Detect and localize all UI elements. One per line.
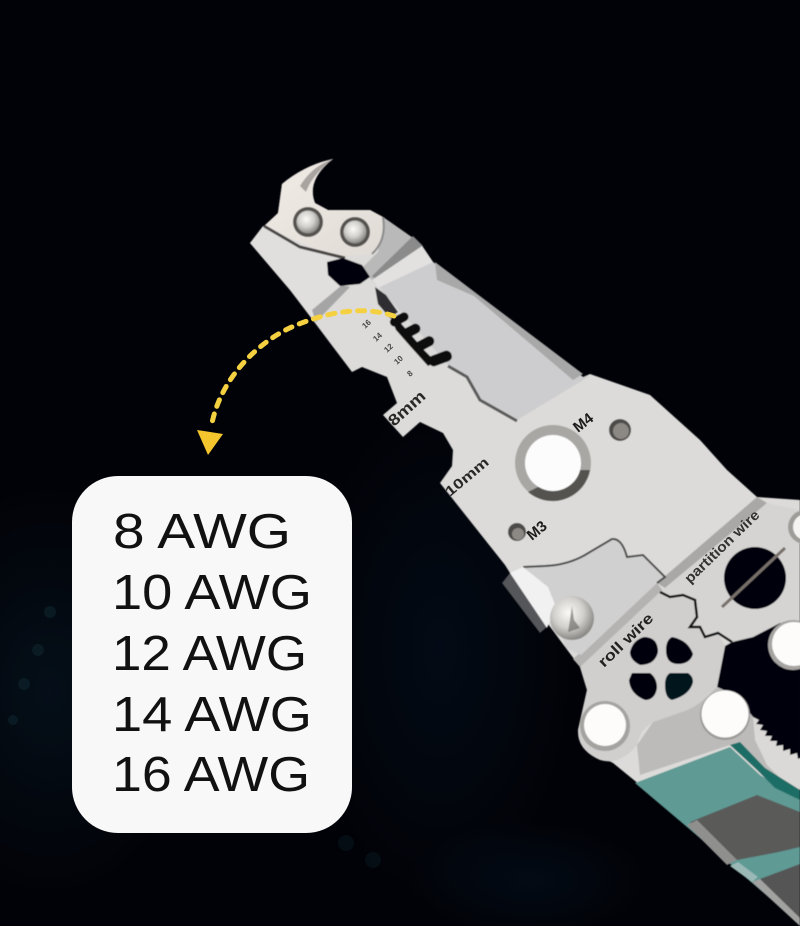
callout: AWG sizes: 8 AWG	[113, 505, 291, 559]
arrowhead	[197, 430, 223, 455]
tool engravings: 14	[371, 330, 384, 343]
callout: AWG sizes: 12 AWG	[112, 627, 307, 681]
main blade	[377, 262, 590, 420]
clover holes	[629, 637, 693, 700]
gear teeth	[753, 717, 800, 790]
rivet bottom left	[580, 701, 630, 751]
roll wire plate	[578, 592, 725, 761]
tool engravings: 8mm	[385, 388, 429, 430]
stripping teeth	[375, 287, 453, 368]
icon: hex opening	[327, 258, 370, 286]
tool engravings	[360, 317, 763, 671]
callout: AWG sizes: 16 AWG	[112, 748, 310, 802]
wire line	[722, 548, 785, 607]
screw	[550, 596, 594, 640]
partition wire plate	[660, 503, 800, 642]
metal body silhouette	[250, 159, 800, 800]
tool engravings: M3	[524, 518, 551, 544]
hook	[264, 159, 384, 256]
tool engravings: 12	[382, 341, 395, 354]
M3 hole	[508, 523, 526, 541]
callout: AWG sizes: 10 AWG	[112, 566, 312, 620]
pliers	[250, 159, 800, 926]
M4 hole	[609, 419, 631, 441]
rivet top right	[788, 510, 800, 544]
callout: AWG sizes: 14 AWG	[112, 688, 312, 742]
rivet right	[768, 620, 800, 670]
tool engravings: M4	[570, 410, 597, 436]
tool engravings: partition wire	[681, 506, 763, 586]
gap right of roll wire plate	[717, 623, 800, 790]
pivot plate seam	[657, 497, 767, 590]
hook rivets	[293, 207, 370, 247]
main pivot rivet	[515, 425, 591, 501]
dashed arrow	[197, 311, 394, 455]
tool engravings: 16	[360, 317, 373, 330]
cut-out panel	[523, 539, 665, 655]
callout: AWG sizes	[72, 476, 352, 833]
icon: partition wire hole	[724, 547, 786, 609]
tool engravings: roll wire	[595, 610, 657, 671]
lower grey strip	[637, 687, 800, 800]
neck plate	[362, 217, 423, 288]
tool engravings: 10mm	[442, 454, 492, 499]
tool engravings: 10	[392, 353, 405, 366]
dark edge below cut-out	[502, 573, 548, 633]
lower jaw	[250, 226, 345, 318]
handle	[635, 742, 800, 926]
rivet centre	[700, 690, 750, 740]
interlocking seam	[660, 592, 732, 642]
tool engravings: 8	[405, 368, 415, 378]
